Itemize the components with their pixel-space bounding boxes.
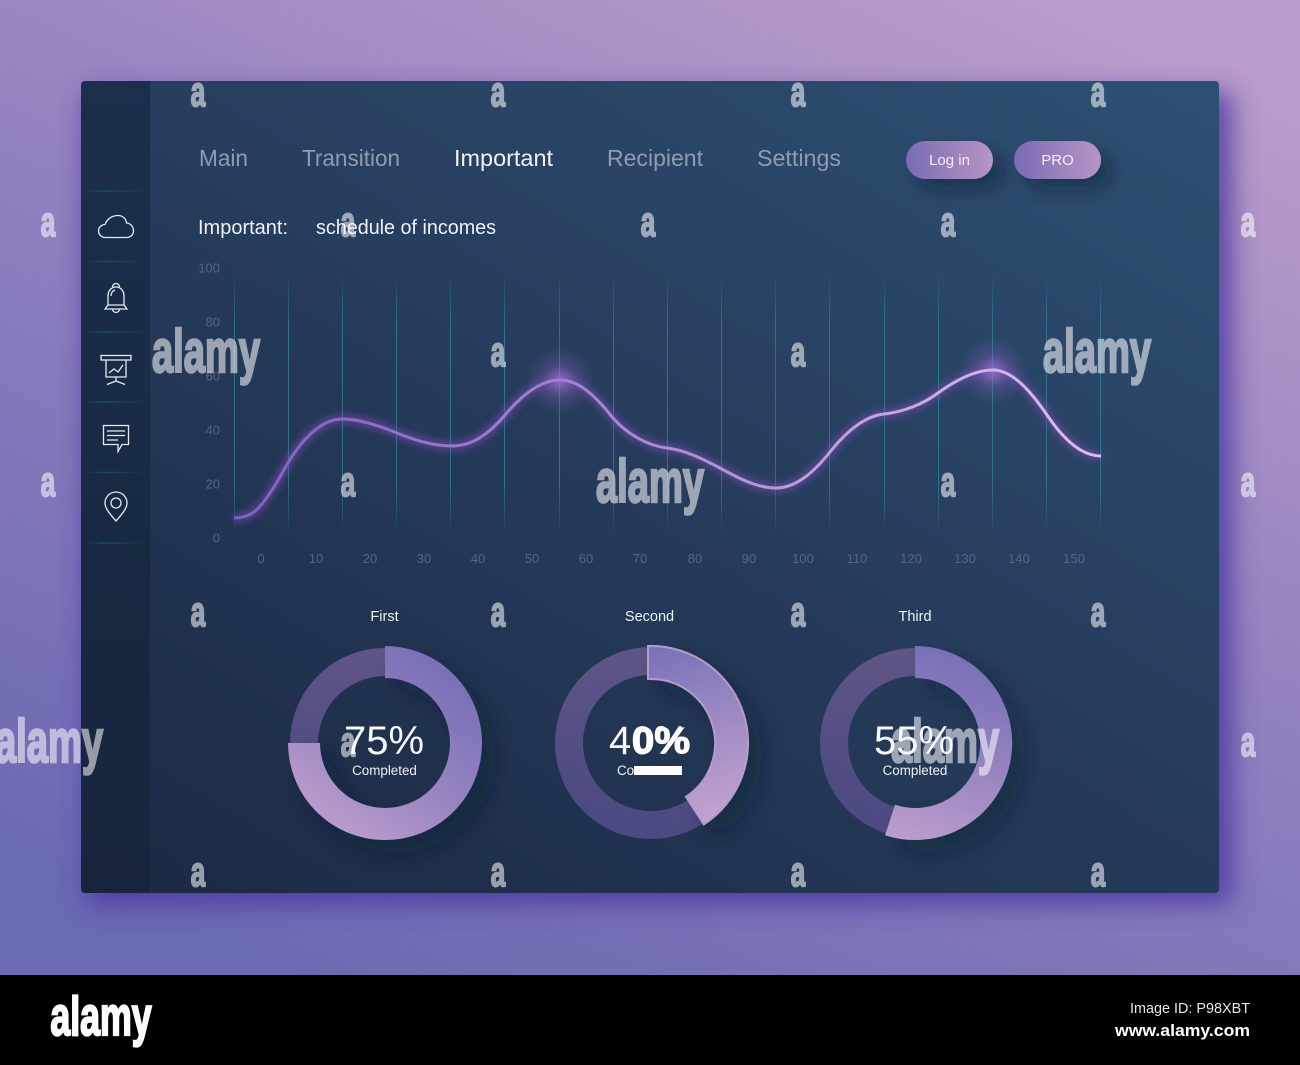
y axis labels: 40 xyxy=(206,422,220,438)
watermarks: a xyxy=(791,69,806,116)
donut: first xyxy=(304,609,466,824)
line chart xyxy=(198,260,1101,566)
watermarks xyxy=(0,69,1256,896)
watermarks: a xyxy=(191,849,206,896)
watermarks: alamy xyxy=(1043,318,1151,385)
chart heading: Important: xyxy=(198,217,288,239)
image id: Image ID: P98XBT xyxy=(1130,1000,1250,1017)
navigation menu: Transition xyxy=(302,145,400,171)
icon: cloud xyxy=(98,216,134,238)
watermarks: a xyxy=(491,849,506,896)
y axis labels: 60 xyxy=(206,368,220,384)
navigation menu: Recipient xyxy=(607,145,704,171)
watermarks: alamy xyxy=(152,318,260,385)
watermarks: a xyxy=(341,719,356,766)
button: pro: PRO xyxy=(1041,152,1074,169)
x axis labels: 50 xyxy=(525,551,539,566)
watermarks: a xyxy=(941,459,956,506)
button: log in xyxy=(906,141,993,179)
x axis labels: 100 xyxy=(792,551,814,566)
watermarks: a xyxy=(41,459,56,506)
x axis labels: 20 xyxy=(363,551,377,566)
watermarks: a xyxy=(191,69,206,116)
chart heading xyxy=(198,217,496,239)
donut three centre text: Completed xyxy=(883,763,947,778)
y axis labels xyxy=(198,260,220,546)
x axis labels: 140 xyxy=(1008,551,1030,566)
y axis labels: 100 xyxy=(198,260,220,276)
panel shadow xyxy=(86,92,1232,904)
button: pro xyxy=(1014,141,1101,179)
icon: location pin xyxy=(105,492,127,521)
watermarks: a xyxy=(491,589,506,636)
x axis labels: 60 xyxy=(579,551,593,566)
x axis labels xyxy=(257,551,1085,566)
navigation menu: Settings xyxy=(757,145,841,171)
navigation menu: Main xyxy=(199,145,248,171)
donut: third xyxy=(834,609,996,824)
navigation menu xyxy=(199,145,841,171)
donut: third: Third xyxy=(898,609,932,625)
peak glows xyxy=(526,337,1027,415)
donut: second: 40% xyxy=(609,719,689,763)
donut: first: 75% xyxy=(344,719,424,763)
icon: chat bubble xyxy=(104,426,128,452)
panel: sidebar xyxy=(81,81,150,893)
footer bar xyxy=(0,975,1300,1065)
donut: second: Co xyxy=(617,763,634,778)
chart heading: schedule of incomes xyxy=(316,217,496,239)
x axis labels: 80 xyxy=(688,551,702,566)
donut: first: First xyxy=(370,609,399,625)
footer url: www.alamy.com xyxy=(1114,1021,1250,1040)
x axis labels: 110 xyxy=(847,551,867,566)
watermarks: a xyxy=(1241,719,1256,766)
donut: second: 0% xyxy=(632,720,690,761)
watermarks: alamy xyxy=(596,448,704,515)
watermarks: a xyxy=(791,329,806,376)
watermarks: a xyxy=(41,199,56,246)
donut: first: Completed xyxy=(352,763,417,778)
watermarks: a xyxy=(1091,849,1106,896)
watermarks: a xyxy=(191,589,206,636)
x axis labels: 130 xyxy=(954,551,976,566)
watermarks: a xyxy=(491,69,506,116)
watermarks: a xyxy=(791,849,806,896)
icon: bell xyxy=(105,284,127,313)
y axis labels: 0 xyxy=(213,530,220,546)
watermarks: a xyxy=(341,199,356,246)
watermarks: a xyxy=(1091,589,1106,636)
button: log in: Log in xyxy=(929,152,970,169)
donut three centre text: 55% xyxy=(874,719,954,763)
x axis labels: 90 xyxy=(742,551,756,566)
curve glow xyxy=(234,370,1101,518)
x axis labels: 70 xyxy=(633,551,647,566)
watermarks: a xyxy=(341,459,356,506)
icon: presentation board xyxy=(101,356,131,384)
dashboard panel xyxy=(81,81,1219,893)
x axis labels: 150 xyxy=(1063,551,1085,566)
watermarks: a xyxy=(791,589,806,636)
watermarks: a xyxy=(641,199,656,246)
watermarks: a xyxy=(941,199,956,246)
income curve xyxy=(234,370,1101,518)
watermarks: alamy xyxy=(891,708,999,775)
x axis labels: 10 xyxy=(309,551,323,566)
navigation menu: Important xyxy=(454,145,554,171)
watermarks: a xyxy=(491,329,506,376)
donut: second: Second xyxy=(625,609,674,625)
x axis labels: 120 xyxy=(900,551,922,566)
x axis labels: 40 xyxy=(471,551,485,566)
y axis labels: 20 xyxy=(206,476,220,492)
x axis labels: 0 xyxy=(257,551,265,566)
watermarks: a xyxy=(1241,459,1256,506)
donut: second xyxy=(569,609,748,825)
watermarks: a xyxy=(1091,69,1106,116)
x axis labels: 30 xyxy=(417,551,431,566)
footer logo: alamy xyxy=(50,985,152,1047)
watermarks: a xyxy=(1241,199,1256,246)
y axis labels: 80 xyxy=(206,314,220,330)
